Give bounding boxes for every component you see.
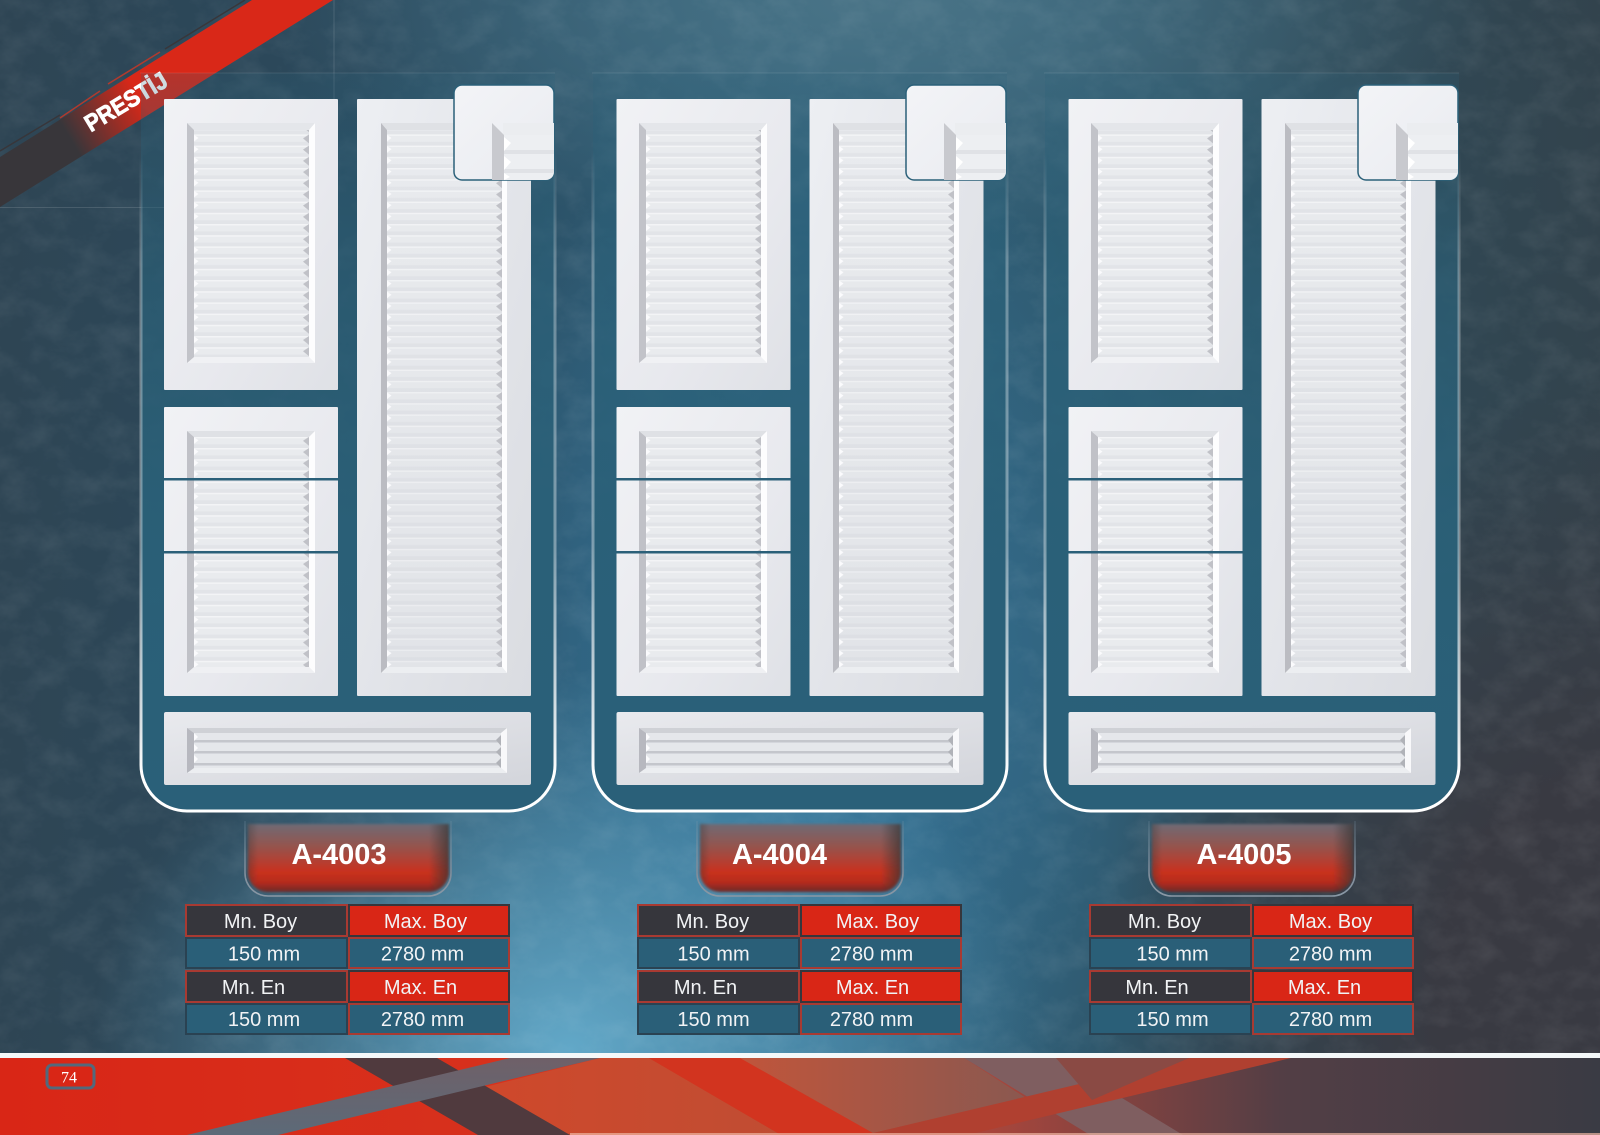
- model label A-4005: [1149, 821, 1355, 896]
- door: upper small louvre: [164, 99, 338, 390]
- spec table A-4005: Mn. Boy: [1128, 911, 1201, 933]
- detail inset: [906, 85, 1007, 180]
- ribbon label: PRESTİJ: [80, 67, 173, 138]
- model label A-4004: [697, 821, 903, 896]
- model label A-4003: [245, 821, 451, 896]
- spec table A-4005: 2780 mm: [1289, 1009, 1372, 1031]
- spec table A-4003: 150 mm: [228, 944, 300, 966]
- door: tall louvre: [1262, 99, 1436, 696]
- door: wide bottom louvre: [1068, 712, 1436, 785]
- spec table A-4004: Mn. Boy: [676, 911, 749, 933]
- spec table A-4003: Max. En: [384, 977, 457, 999]
- spec table A-4005: Mn. En: [1125, 977, 1189, 999]
- panel: model A-4003: [140, 73, 555, 811]
- panel frame: [1044, 73, 1459, 811]
- page number: [47, 1065, 94, 1088]
- spec table A-4003: Mn. Boy: [224, 911, 297, 933]
- spec table A-4004: Max. Boy: [836, 911, 919, 933]
- model label A-4003: A-4003: [291, 839, 387, 871]
- spec table A-4003: Max. Boy: [384, 911, 467, 933]
- door: lower small louvre: [616, 407, 790, 696]
- spec table A-4003: 2780 mm: [381, 1009, 464, 1031]
- spec table A-4005: 150 mm: [1136, 1009, 1209, 1031]
- page number: 74: [61, 1070, 77, 1086]
- footer band: [0, 1053, 1600, 1135]
- spec table A-4003: Mn. En: [222, 977, 285, 999]
- spec table A-4005: Max. Boy: [1289, 911, 1372, 933]
- spec table A-4005: 150 mm: [1136, 944, 1209, 966]
- panel frame: [592, 73, 1007, 811]
- model label A-4004: A-4004: [732, 839, 827, 871]
- spec table A-4003: 150 mm: [228, 1009, 300, 1031]
- spec table A-4004: [638, 905, 961, 1034]
- spec table A-4004: Mn. En: [674, 977, 737, 999]
- door: wide bottom louvre: [616, 712, 984, 785]
- spec table A-4004: 2780 mm: [830, 944, 913, 966]
- door: tall louvre: [357, 99, 531, 696]
- door: wide bottom louvre: [164, 712, 531, 785]
- corner guide lines: [0, 0, 334, 208]
- door: upper small louvre: [616, 99, 790, 390]
- panel: model A-4004: [592, 73, 1007, 811]
- panel frame: [140, 73, 555, 811]
- spec table A-4004: 150 mm: [677, 1009, 750, 1031]
- spec table A-4004: 150 mm: [677, 944, 750, 966]
- spec table A-4005: [1090, 905, 1413, 1034]
- door: upper small louvre: [1068, 99, 1242, 390]
- door: tall louvre: [810, 99, 984, 696]
- detail inset: [454, 85, 555, 180]
- detail inset: [1358, 85, 1459, 180]
- spec table A-4004: Max. En: [836, 977, 909, 999]
- model label A-4005: A-4005: [1196, 839, 1292, 871]
- spec table A-4005: Max. En: [1288, 977, 1361, 999]
- spec table A-4003: 2780 mm: [381, 944, 464, 966]
- door: lower small louvre: [1068, 407, 1242, 696]
- spec table A-4003: [186, 905, 509, 1034]
- door: lower small louvre: [164, 407, 338, 696]
- panel: model A-4005: [1044, 73, 1459, 811]
- spec table A-4004: 2780 mm: [830, 1009, 913, 1031]
- spec table A-4005: 2780 mm: [1289, 944, 1372, 966]
- corner ribbon: [0, 0, 333, 207]
